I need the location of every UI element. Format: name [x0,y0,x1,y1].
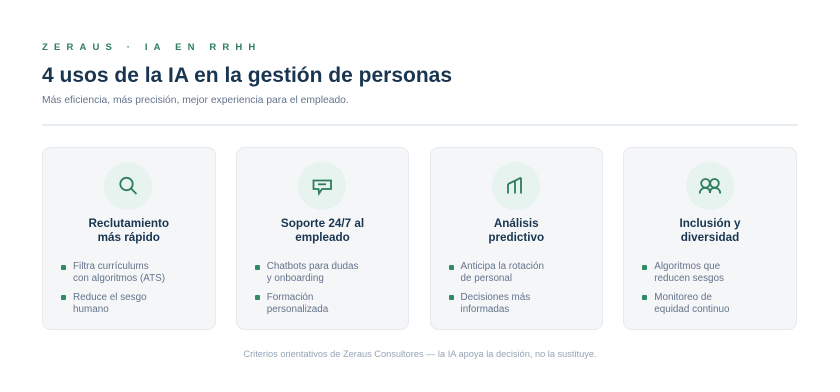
card heading [679,217,741,244]
bullet text: personalizada [267,304,328,315]
bullet text: humano [73,304,109,315]
bullet text: equidad continuo [654,304,729,315]
bullet marker [61,295,66,300]
icon: rising bars [492,162,540,210]
bullet text: informadas [460,304,509,315]
icon: magnifying glass [104,162,152,210]
card heading: Soporte 24/7 al [281,217,364,230]
panel: inclusion [623,147,797,330]
title: 4 usos de la IA en la gestión de personas [42,64,452,87]
bullet text [460,261,544,284]
bullet text: Reduce el sesgo [73,292,147,303]
bullet text [73,292,147,315]
bullet text: Algoritmos que [654,261,720,272]
bullet text: Formación [267,292,313,303]
bullet text [460,292,530,315]
bullet text [654,292,730,315]
card heading: Análisis [494,217,539,230]
bullet marker [255,295,260,300]
bullet marker [642,264,647,270]
bullet marker [255,264,260,270]
bullet text: Filtra currículums [73,261,149,272]
bullet marker [448,295,454,300]
bullet text: con algoritmos (ATS) [73,273,165,284]
card heading [488,217,544,244]
footer note: Criterios orientativos de Zeraus Consultores — la IA apoya la decisión, no la sustituye. [243,349,597,359]
panel: analisis [430,147,603,330]
bullet text: reducen sesgos [654,273,724,284]
panel: soporte [236,147,409,330]
panel: reclutamiento [42,147,216,330]
card heading [281,217,364,244]
bullet marker [642,295,647,300]
bullet text: Decisiones más [460,292,530,303]
bullet marker [61,264,66,270]
card heading [88,217,169,244]
card heading: más rápido [98,231,160,244]
bullet text [267,292,328,315]
bullet text: Chatbots para dudas [267,261,358,272]
bullet text: y onboarding [267,273,324,284]
card heading: empleado [295,231,350,244]
icon: chat bubble [298,162,346,210]
bullet text: Monitoreo de [654,292,712,303]
subtitle: Más eficiencia, más precisión, mejor experiencia para el empleado. [42,95,349,106]
card heading: diversidad [681,231,739,244]
eyebrow: ZERAUS · IA EN RRHH [42,42,261,53]
bullet text [73,261,165,284]
bullet text [266,261,358,284]
card heading: Inclusión y [679,217,741,230]
card heading: Reclutamiento [88,217,169,230]
bullet text [654,261,724,284]
bullet text: Anticipa la rotación [460,261,544,272]
bullet marker [448,264,454,270]
card heading: predictivo [488,231,544,244]
bullet text: de personal [460,273,512,284]
icon: two people [686,162,734,210]
